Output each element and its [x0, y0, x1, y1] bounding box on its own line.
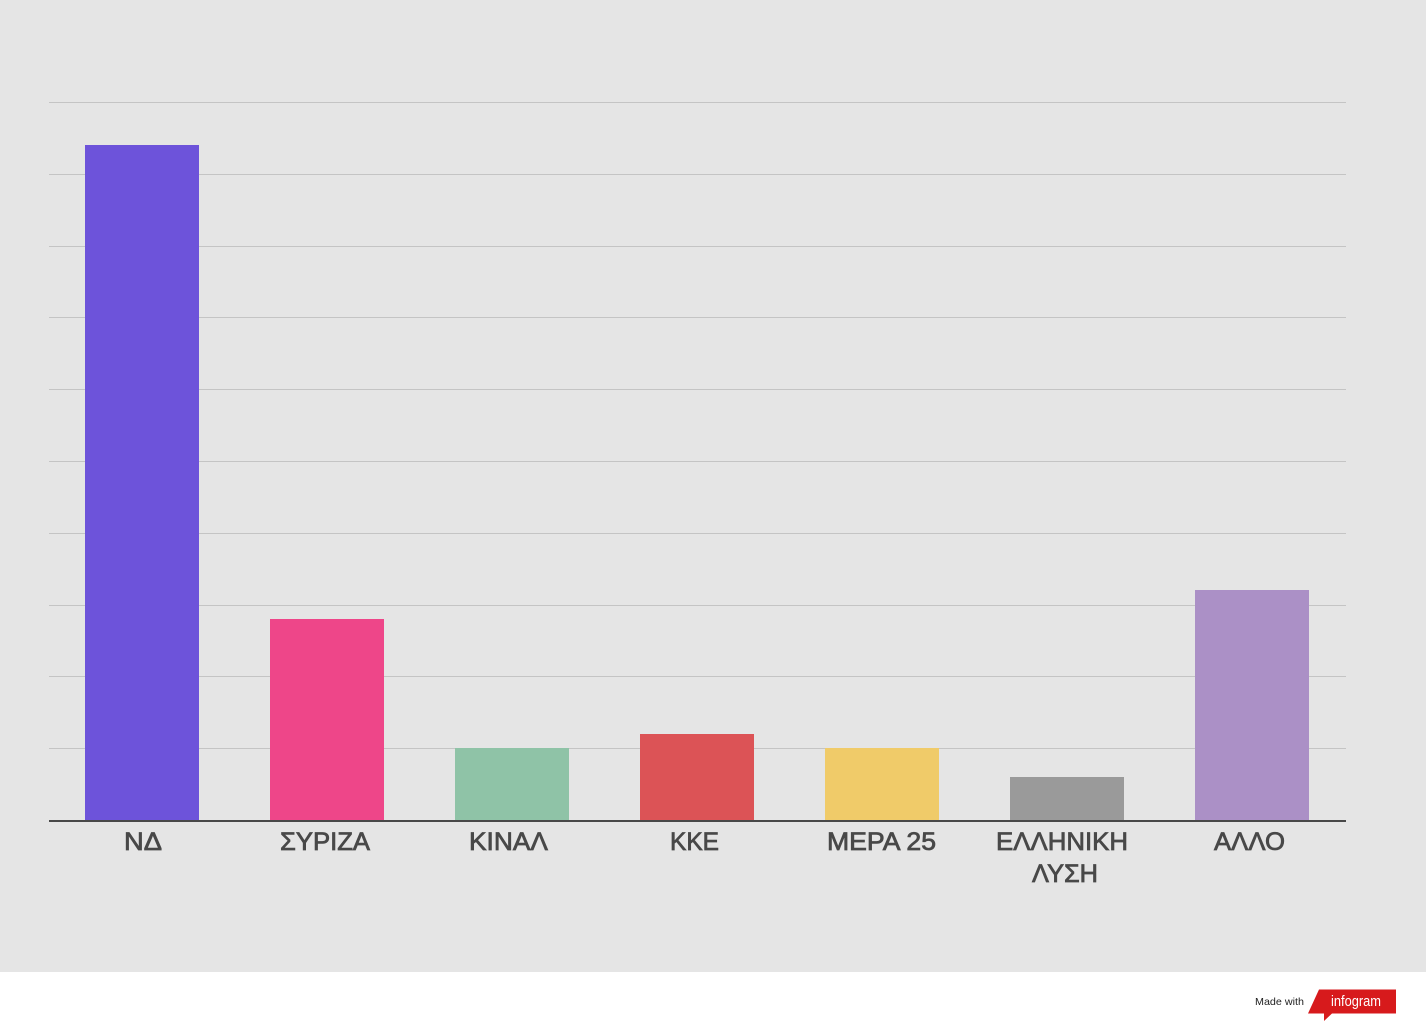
made with text: Made with: [1255, 996, 1304, 1008]
bar chart: [85, 145, 1309, 820]
footer: made with infogram: [1255, 990, 1396, 1021]
label: ΜΕΡΑ 25: ΜΕΡΑ 25: [827, 828, 936, 856]
label: ΣΥΡΙΖΑ: ΣΥΡΙΖΑ: [280, 828, 370, 856]
bar: ΚΚΕ: [640, 734, 754, 820]
label: ΕΛΛΗΝΙΚΗ ΛΥΣΗ: [996, 828, 1128, 888]
bar: ΕΛΛΗΝΙΚΗ ΛΥΣΗ: [1010, 777, 1124, 820]
x axis line: [49, 820, 1346, 822]
bar: ΜΕΡΑ 25: [825, 748, 939, 820]
bar: ΚΙΝΑΛ: [455, 748, 569, 820]
bar: ΣΥΡΙΖΑ: [270, 619, 384, 820]
label: ΝΔ: ΝΔ: [124, 828, 162, 856]
label: ΚΚΕ: ΚΚΕ: [670, 828, 719, 856]
category labels: [124, 828, 1285, 888]
label: ΕΛΛΗΝΙΚΗ ΛΥΣΗ: ΕΛΛΗΝΙΚΗ: [996, 828, 1128, 856]
label: ΚΙΝΑΛ: ΚΙΝΑΛ: [469, 828, 548, 856]
label: ΕΛΛΗΝΙΚΗ ΛΥΣΗ: ΛΥΣΗ: [1032, 860, 1098, 888]
logo text: infogram: [1331, 993, 1381, 1010]
bar: ΑΛΛΟ: [1195, 590, 1309, 820]
label: ΑΛΛΟ: ΑΛΛΟ: [1214, 828, 1285, 856]
icon: infogram logo: [1308, 990, 1396, 1021]
bar: ΝΔ: [85, 145, 199, 820]
